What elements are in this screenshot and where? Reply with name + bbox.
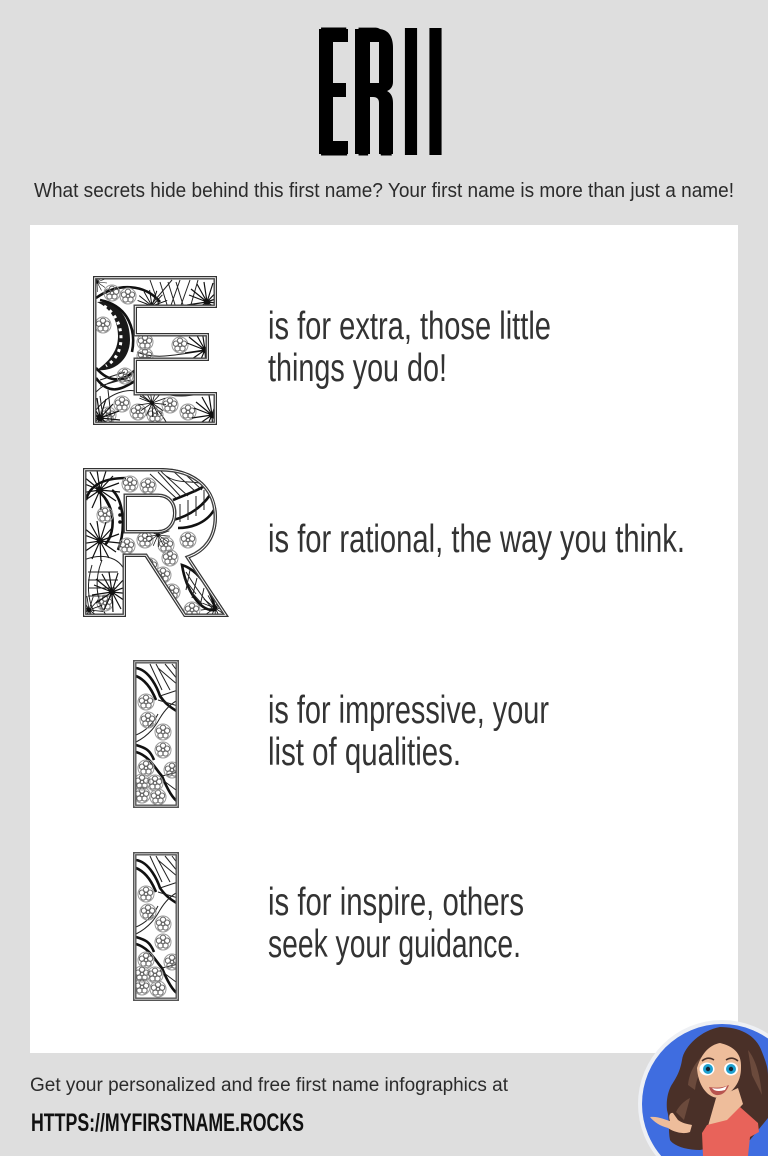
- title: R: [357, 0, 390, 187]
- footer text: Get your personalized and free first name infographics at: [30, 1075, 509, 1096]
- title: [319, 0, 444, 188]
- subtitle: What secrets hide behind this first name? Your first name is more than just a name!: [34, 180, 734, 202]
- icon: doodle letter I (first): [133, 660, 180, 808]
- text: E line: things you do!: [268, 347, 447, 390]
- title: I: [402, 0, 420, 188]
- text: I line one: is for impressive, your: [268, 689, 549, 732]
- icon: doodle letter R: [75, 468, 229, 624]
- text: I line two: seek your guidance.: [268, 923, 521, 966]
- title: E: [320, 0, 347, 187]
- icon: avatar: [638, 1020, 768, 1156]
- text: I line one: list of qualities.: [268, 731, 461, 774]
- text: I line two: [268, 881, 524, 966]
- text: I line one: [268, 689, 549, 774]
- text: E line: is for extra, those little: [268, 305, 551, 348]
- icon: doodle letter I (second): [133, 852, 180, 1001]
- icon: doodle letter E: [93, 276, 217, 425]
- panel: letters: [30, 225, 738, 1053]
- text: E line: [268, 305, 551, 390]
- text: I line two: is for inspire, others: [268, 881, 524, 924]
- footer url: HTTPS://MYFIRSTNAME.ROCKS: [31, 1109, 304, 1137]
- title: I: [427, 0, 444, 188]
